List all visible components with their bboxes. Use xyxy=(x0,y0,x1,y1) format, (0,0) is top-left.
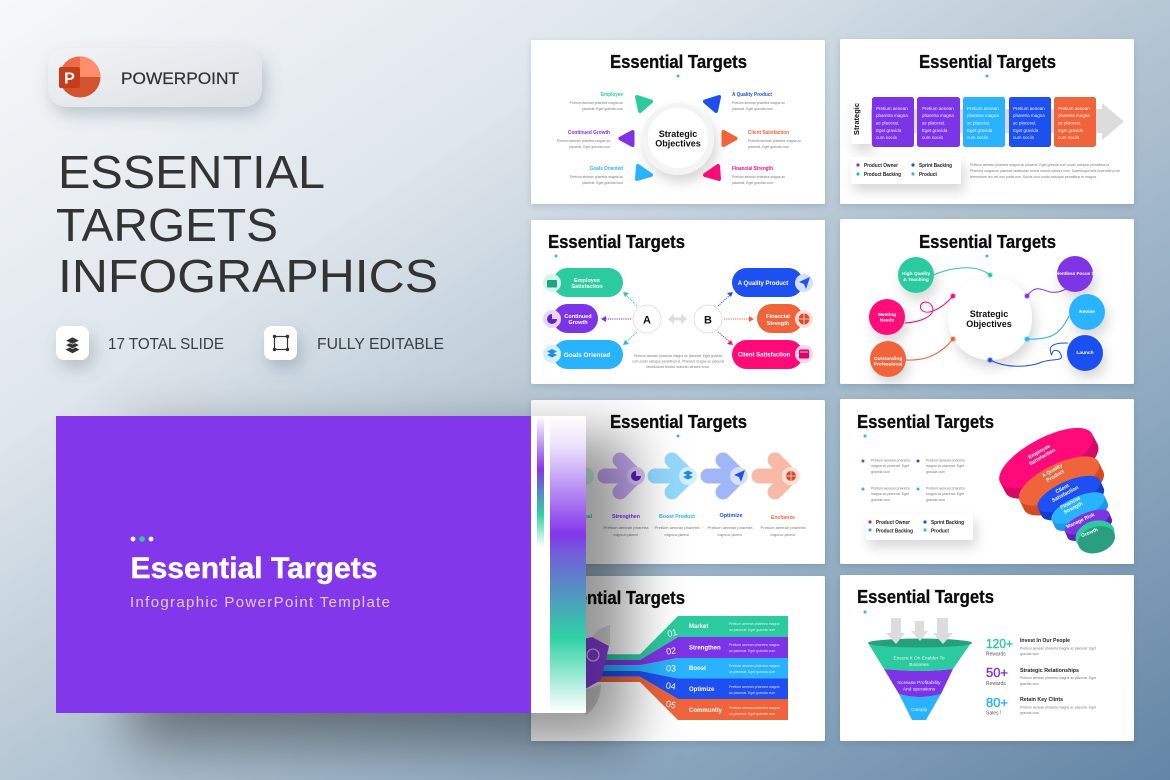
left pills: Continued xyxy=(564,314,592,320)
bullet notes: magna ac placerat. Eget xyxy=(926,464,964,468)
icon: pie xyxy=(627,467,645,485)
row numbers xyxy=(665,627,678,711)
feature: 17 total slide: 17 TOTAL SLIDE xyxy=(108,336,224,353)
colour boxes: Pretium aenean xyxy=(967,106,999,111)
colour boxes: Eget gravida xyxy=(876,128,902,133)
slide 4: strategic objectives bubbles xyxy=(840,219,1134,384)
labels: Financial Strength xyxy=(732,166,773,172)
icon: powerpoint logo xyxy=(59,56,100,98)
row labels: Strengthen xyxy=(689,646,721,652)
row labels: Boost xyxy=(689,666,706,672)
stat descriptions: Pretium aenean pharetra magna ac placerat. Eget xyxy=(1020,646,1096,650)
bullet notes: gravida cum xyxy=(871,498,890,502)
bubble labels: Meeting xyxy=(878,312,896,318)
main title: TARGETS xyxy=(56,199,278,251)
colour boxes: Eget gravida xyxy=(1013,128,1039,133)
slide 1: strategic objectives with triangles: Essential Targets xyxy=(610,51,747,72)
B circle xyxy=(694,305,722,333)
legend card: Product Owner xyxy=(864,163,898,169)
labels: placerat. Eget gravida cum xyxy=(748,145,789,149)
left pills: Satisfaction xyxy=(571,284,603,290)
funnel layers xyxy=(991,416,1120,558)
stat descriptions xyxy=(1020,638,1096,715)
bullet notes: magna ac placerat. Eget xyxy=(871,464,909,468)
arrow: enchance xyxy=(759,460,791,492)
row descriptions: ac placerat. Eget gravida cum xyxy=(729,712,775,716)
icon: transform square xyxy=(273,335,289,351)
row descriptions: ac placerat. Eget gravida cum xyxy=(729,628,775,632)
labels: Pretium aenean pharetra xyxy=(708,526,753,530)
input arrows xyxy=(886,618,953,644)
icon: window xyxy=(799,350,809,358)
row labels: Community xyxy=(689,708,723,714)
funnel layers: Satisfaction xyxy=(1028,447,1057,467)
row numbers: 04 xyxy=(665,680,677,692)
labels: Pretium aenean pharetra magna ac xyxy=(557,139,610,143)
slide 2: strategic process arrow xyxy=(840,39,1134,204)
row descriptions: Pretium aenean pharetra magna xyxy=(729,664,779,668)
bubble labels: Outstanding xyxy=(874,356,902,362)
feature: fully editable xyxy=(264,326,444,360)
labels: Strengthen xyxy=(612,514,640,520)
stats: Rewards xyxy=(986,681,1006,687)
stats: 50+ xyxy=(986,665,1008,680)
funnel xyxy=(868,638,972,720)
bubble labels: High Quality xyxy=(902,271,930,277)
stat descriptions: gravida cum xyxy=(1020,682,1039,686)
labels: Pretium aenean pharetra xyxy=(760,526,806,530)
colour boxes: Pretium aenean xyxy=(876,106,908,111)
right pills: A Quality Product xyxy=(738,281,788,287)
slide 1: strategic objectives with triangles xyxy=(531,40,825,204)
labels: placerat. Eget gravida cum xyxy=(582,181,623,185)
colour boxes: pharetra magna xyxy=(922,113,954,118)
bullet notes: magna ac placerat. Eget xyxy=(871,492,909,496)
central circle: Objectives xyxy=(655,138,701,148)
right pills: Client Satisfaction xyxy=(738,352,791,358)
bullet notes: Pretium aenean pharetra xyxy=(926,486,965,490)
stats xyxy=(986,636,1013,716)
powerpoint badge: POWERPOINT xyxy=(121,70,239,88)
colour boxes: cum sociis xyxy=(967,135,989,140)
funnel layers: Employee xyxy=(1027,443,1052,461)
legend card: Sprint Backing xyxy=(931,520,964,526)
right pills: Financial xyxy=(766,314,790,320)
slide 3: A and B comparison xyxy=(531,220,825,384)
funnel layers: Financial xyxy=(1060,495,1082,511)
left pills: Goals Oriented xyxy=(564,352,610,359)
colour boxes: ac placerat. xyxy=(1013,120,1036,126)
funnel: Business xyxy=(909,662,929,668)
row descriptions: ac placerat. Eget gravida cum xyxy=(729,670,775,674)
strategic label xyxy=(851,100,871,144)
strategic label: Strategic xyxy=(852,103,861,135)
bullet notes xyxy=(862,458,965,502)
paragraph: Pretium aenean pharetra magna ac placerat. Eget gravida cum sociis natoque penatibus et. xyxy=(970,163,1110,167)
funnel layers: Satisfaction xyxy=(1051,485,1080,504)
stat descriptions: Retain Key Clints xyxy=(1020,697,1063,703)
central circle xyxy=(948,276,1032,360)
labels: Pretium aenean pharetra magna ac xyxy=(748,139,801,143)
paragraph: Pharetra magna ac placerat vestibulum lectus mauris ultrices eros. Scelerisque felis imperdiet proin xyxy=(970,169,1120,173)
right pills xyxy=(732,268,813,369)
legend card xyxy=(866,514,973,540)
paragraph xyxy=(632,354,724,369)
labels: magna ac placerat. xyxy=(614,533,639,537)
paragraph: vestibulum lectus mauris ultrices eros. xyxy=(646,365,710,369)
funnel layers: A Quality xyxy=(1041,463,1064,479)
stat descriptions: Pretium aenean pharetra magna ac placerat. Eget xyxy=(1020,706,1096,710)
main title: INFOGRAPHICS xyxy=(58,250,438,302)
icon: first step xyxy=(576,467,594,485)
paragraph: Pretium aenean pharetra magna ac placerat. Eget gravida xyxy=(634,354,722,358)
central circle xyxy=(642,103,714,175)
grey arrow xyxy=(868,103,1124,140)
bullet notes: Pretium aenean pharetra xyxy=(871,458,910,462)
labels: Goals Oriented xyxy=(590,166,623,172)
rocket shape xyxy=(580,625,610,716)
connectors xyxy=(905,268,1069,366)
stat descriptions: Invest In Our People xyxy=(1020,638,1070,644)
row descriptions: ac placerat. Eget gravida cum xyxy=(729,649,775,653)
stat descriptions: Strategic Relationships xyxy=(1020,668,1079,674)
legend card: Product Owner xyxy=(876,520,910,526)
row descriptions: ac placerat. Eget gravida cum xyxy=(729,691,775,695)
slide 3: A and B comparison: Essential Targets xyxy=(548,231,685,252)
funnel: Increase Profitability xyxy=(897,680,941,686)
row descriptions: Pretium aenean pharetra magna xyxy=(729,706,779,710)
slide 7: ribbon list: Essential Targets xyxy=(548,587,685,608)
double arrow xyxy=(668,314,687,324)
icon: navigation xyxy=(799,277,810,289)
stats: Sales ! xyxy=(986,710,1001,716)
colour boxes: Eget gravida xyxy=(967,128,993,133)
labels: Client Satisfaction xyxy=(748,130,789,136)
bubble labels: Professional xyxy=(874,362,902,368)
icon: navigation xyxy=(730,467,748,485)
stats: Rewards xyxy=(986,652,1006,658)
legend card: Product Backing xyxy=(876,528,913,534)
labels: placerat. Eget gravida cum xyxy=(569,145,610,149)
colour boxes: cum sociis xyxy=(1013,135,1035,140)
B circle: B xyxy=(704,314,712,326)
stat descriptions: gravida cum xyxy=(1020,652,1039,656)
labels: A Quality Product xyxy=(732,92,772,98)
icon: globe xyxy=(798,314,810,324)
row descriptions: Pretium aenean pharetra magna xyxy=(729,643,779,647)
labels: Goal xyxy=(581,514,593,520)
labels: Pretium aenean pharetra magna ac xyxy=(570,175,623,179)
central circle: Objectives xyxy=(966,319,1012,329)
slide 5: arrows process xyxy=(531,400,825,564)
white gradient strip xyxy=(531,416,586,713)
labels: placerat. Eget gravida cum xyxy=(732,107,773,111)
legend card xyxy=(851,157,961,184)
icon: layers xyxy=(66,337,80,353)
labels xyxy=(581,513,806,537)
paragraph: fermentum leo vel orci porta non. Sociis cum sociis natoque penatibus et magna. xyxy=(970,175,1097,179)
row numbers: 01 xyxy=(666,627,678,639)
stats: 80+ xyxy=(986,695,1008,710)
slide 8: funnel with stats xyxy=(840,575,1134,741)
purple panel shadow xyxy=(130,435,630,745)
colour boxes: ac placerat. xyxy=(967,120,990,126)
labels: Pretium aenean pharetra xyxy=(604,526,649,530)
colour boxes: Eget gravida xyxy=(1058,128,1084,133)
icon: briefcase xyxy=(547,280,557,288)
labels: Pretium aenean pharetra xyxy=(654,526,700,530)
row descriptions: Pretium aenean pharetra magna xyxy=(729,685,779,689)
bullet notes: gravida cum xyxy=(871,470,890,474)
decorative dots xyxy=(131,536,153,542)
labels: placerat. Eget gravida cum xyxy=(732,181,773,185)
bubble labels: Relentless Focus On xyxy=(1052,271,1098,277)
A circle: A xyxy=(643,314,651,326)
icon: layers xyxy=(679,467,697,485)
colour boxes: cum sociis xyxy=(922,135,944,140)
colour boxes xyxy=(872,97,1096,147)
row numbers: 03 xyxy=(666,664,676,674)
right pills: Strength xyxy=(767,321,790,327)
arrow heads xyxy=(601,292,754,345)
labels: Continued Growth xyxy=(568,130,610,136)
legend card: Product xyxy=(919,172,937,178)
legend card: Product xyxy=(931,528,949,534)
slide 2: strategic process arrow: Essential Targets xyxy=(919,51,1056,72)
labels: Boost Product xyxy=(659,514,695,520)
labels: Pretium aenean pharetra magna ac xyxy=(732,175,785,179)
central circle: Strategic xyxy=(659,129,697,139)
left pills xyxy=(543,268,623,369)
triangles xyxy=(620,97,736,179)
bubble labels: Needs xyxy=(880,318,895,324)
ribbon bands xyxy=(530,616,788,720)
row labels xyxy=(689,624,723,714)
bubble labels: Revise xyxy=(1079,309,1095,315)
labels: magna ac placerat. xyxy=(664,533,690,537)
left pills: Employee xyxy=(574,278,600,284)
powerpoint badge xyxy=(48,48,262,107)
main title xyxy=(56,146,438,302)
slide 7: ribbon list xyxy=(530,576,825,741)
labels: magna ac placerat. xyxy=(718,533,743,537)
slide 4: strategic objectives bubbles: Essential Targets xyxy=(919,231,1056,252)
labels: placerat. Eget gravida cum xyxy=(582,107,623,111)
icon: layers xyxy=(547,349,557,358)
purple cover panel: Infographic PowerPoint Template xyxy=(130,594,390,611)
bullet notes: magna ac placerat. Eget xyxy=(926,492,964,496)
labels xyxy=(557,92,801,185)
colour boxes: ac placerat. xyxy=(1058,120,1081,126)
nodes xyxy=(951,273,1029,362)
colour boxes: Pretium aenean xyxy=(1013,106,1045,111)
purple cover panel xyxy=(56,416,531,713)
labels: Optimize xyxy=(720,513,743,519)
central circle: Strategic xyxy=(970,309,1008,319)
feature: 17 total slide xyxy=(56,326,224,360)
main title: ESSENTIAL xyxy=(58,146,325,198)
bullet notes: gravida cum xyxy=(926,470,945,474)
funnel layers: Manage Risk xyxy=(1065,512,1096,530)
labels: Pretium aenean pharetra magna ac xyxy=(732,101,785,105)
colour boxes: pharetra magna xyxy=(1058,113,1090,118)
bubble labels: & Teaching xyxy=(903,277,929,283)
colour boxes: pharetra magna xyxy=(1013,113,1045,118)
paragraph: cum sociis natoque penatibus et. Pharetra magna ac placerat xyxy=(632,360,724,364)
colour boxes: cum sociis xyxy=(1058,135,1080,140)
labels: Employee xyxy=(601,92,623,98)
funnel layers: Client xyxy=(1055,483,1071,495)
funnel: And operations xyxy=(903,686,936,692)
funnel layers: Product xyxy=(1046,469,1066,484)
labels: Pretium aenean pharetra magna ac xyxy=(570,101,623,105)
icon: globe xyxy=(782,467,800,485)
colour boxes: ac placerat. xyxy=(876,120,899,126)
funnel layers: Growth xyxy=(1080,527,1099,539)
bubble labels: Launch xyxy=(1076,350,1094,356)
bubbles xyxy=(869,256,1105,377)
bullet notes: gravida cum xyxy=(926,498,945,502)
funnel layers: Strength xyxy=(1063,501,1084,516)
bullet notes: Pretium aenean pharetra xyxy=(926,458,965,462)
bullet notes: Pretium aenean pharetra xyxy=(871,486,910,490)
slide 5: arrows process: Essential Targets xyxy=(610,411,747,432)
purple cover panel: Essential Targets xyxy=(130,552,378,585)
stats: 120+ xyxy=(986,636,1013,651)
bubble labels xyxy=(874,271,1098,368)
row descriptions xyxy=(729,622,779,716)
left pills: Growth xyxy=(568,320,588,326)
colour boxes: pharetra magna xyxy=(967,113,999,118)
row labels: Market xyxy=(689,624,708,630)
funnel: Comply xyxy=(911,707,928,713)
funnel: Ensure It On Enabler To xyxy=(893,656,945,662)
slide 6: 3D funnel: Essential Targets xyxy=(857,411,994,432)
slide 8: funnel with stats: Essential Targets xyxy=(857,586,994,607)
stat descriptions: Pretium aenean pharetra magna ac placerat. Eget xyxy=(1020,676,1096,680)
stat descriptions: gravida cum xyxy=(1020,711,1039,715)
legend card: Sprint Backing xyxy=(919,163,952,169)
colour boxes: Pretium aenean xyxy=(922,106,954,111)
colour boxes: Pretium aenean xyxy=(1058,106,1090,111)
labels: Enchance xyxy=(771,515,795,521)
icon: powerpoint logo: P xyxy=(64,70,75,88)
arrow: optimize xyxy=(708,460,739,492)
paragraph xyxy=(970,163,1120,179)
row numbers: 02 xyxy=(665,645,677,657)
colour boxes: cum sociis xyxy=(876,135,898,140)
legend card: Product Backing xyxy=(864,172,901,178)
colour boxes: Eget gravida xyxy=(922,128,948,133)
dotted arrows xyxy=(604,295,751,342)
row descriptions: Pretium aenean pharetra magna xyxy=(729,622,779,626)
row labels: Optimize xyxy=(689,687,715,693)
arrow: strengthen xyxy=(605,460,636,492)
feature: fully editable: FULLY EDITABLE xyxy=(317,336,444,353)
A circle xyxy=(633,305,661,333)
icon: pie xyxy=(547,314,557,324)
slide 6: 3D funnel xyxy=(840,399,1134,564)
labels: magna ac placerat. xyxy=(770,533,796,537)
colour boxes: pharetra magna xyxy=(876,113,908,118)
colour boxes: ac placerat. xyxy=(922,120,945,126)
arrow: boost xyxy=(655,460,688,492)
row numbers: 05 xyxy=(665,698,677,711)
